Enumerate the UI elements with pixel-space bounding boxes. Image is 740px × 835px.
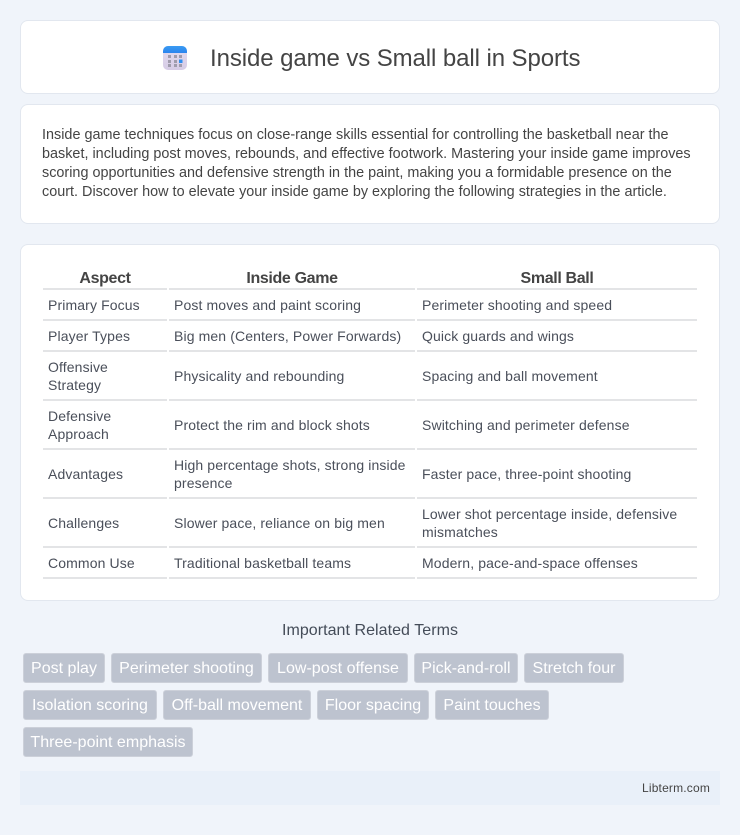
comparison table panel: Post moves and paint scoring: [174, 297, 361, 313]
text: Stretch four: [533, 660, 615, 677]
comparison table panel: Small Ball: [520, 270, 593, 287]
title card: [20, 20, 720, 94]
comparison table panel: Spacing and ball movement: [422, 368, 598, 384]
icon: calendar: [163, 46, 187, 70]
comparison table panel: Protect the rim and block shots: [174, 417, 370, 433]
text: Off-ball movement: [172, 697, 302, 714]
text: Three-point emphasis: [30, 734, 186, 751]
comparison table panel: Offensive: [48, 359, 108, 375]
text: Isolation scoring: [32, 697, 148, 714]
comparison table panel: [20, 244, 720, 601]
text: Low-post offense: [277, 660, 399, 677]
comparison table panel: mismatches: [422, 524, 498, 540]
intro text: [42, 127, 691, 200]
related terms heading: Important Related Terms: [282, 622, 458, 639]
intro text panel: [20, 104, 720, 224]
text: Floor spacing: [325, 697, 421, 714]
text: Perimeter shooting: [119, 660, 254, 677]
text: Pick-and-roll: [421, 660, 511, 677]
text: Post play: [31, 660, 97, 677]
comparison table: [43, 270, 697, 579]
comparison table panel: Defensive: [48, 408, 111, 424]
comparison table panel: presence: [174, 475, 233, 491]
comparison table panel: Challenges: [48, 515, 119, 531]
comparison table panel: High percentage shots, strong inside: [174, 457, 406, 473]
comparison table panel: Inside Game: [246, 270, 338, 287]
comparison table panel: Aspect: [79, 270, 131, 287]
comparison table panel: Slower pace, reliance on big men: [174, 515, 385, 531]
intro text panel: scoring opportunities and defensive strength in the paint, making you a formidable presence on the: [42, 165, 672, 181]
comparison table panel: Player Types: [48, 328, 130, 344]
comparison table panel: Perimeter shooting and speed: [422, 297, 612, 313]
comparison table panel: Big men (Centers, Power Forwards): [174, 328, 401, 344]
footer bar: [20, 771, 720, 805]
comparison table panel: Quick guards and wings: [422, 328, 574, 344]
comparison table panel: Traditional basketball teams: [174, 555, 351, 571]
comparison table panel: Common Use: [48, 555, 135, 571]
comparison table panel: Modern, pace-and-space offenses: [422, 555, 638, 571]
intro text panel: Inside game techniques focus on close-range skills essential for controlling the basketball near the: [42, 127, 669, 143]
comparison table panel: Switching and perimeter defense: [422, 417, 630, 433]
comparison table panel: Advantages: [48, 466, 123, 482]
table header: [79, 270, 593, 287]
related terms tags: [23, 653, 624, 757]
comparison table panel: Faster pace, three-point shooting: [422, 466, 631, 482]
footer credit: Libterm.com: [642, 781, 710, 795]
intro text panel: basket, including post moves, rebounds, and effective footwork. Mastering your inside game improves: [42, 146, 691, 162]
comparison table panel: Physicality and rebounding: [174, 368, 344, 384]
text: Paint touches: [443, 697, 541, 714]
comparison table panel: Approach: [48, 426, 109, 442]
comparison table panel: Lower shot percentage inside, defensive: [422, 506, 677, 522]
title: Inside game vs Small ball in Sports: [210, 45, 580, 72]
intro text panel: court. Discover how to elevate your inside game by exploring the following strategies in the article.: [42, 184, 667, 200]
comparison table panel: Strategy: [48, 377, 101, 393]
comparison table panel: Primary Focus: [48, 297, 140, 313]
